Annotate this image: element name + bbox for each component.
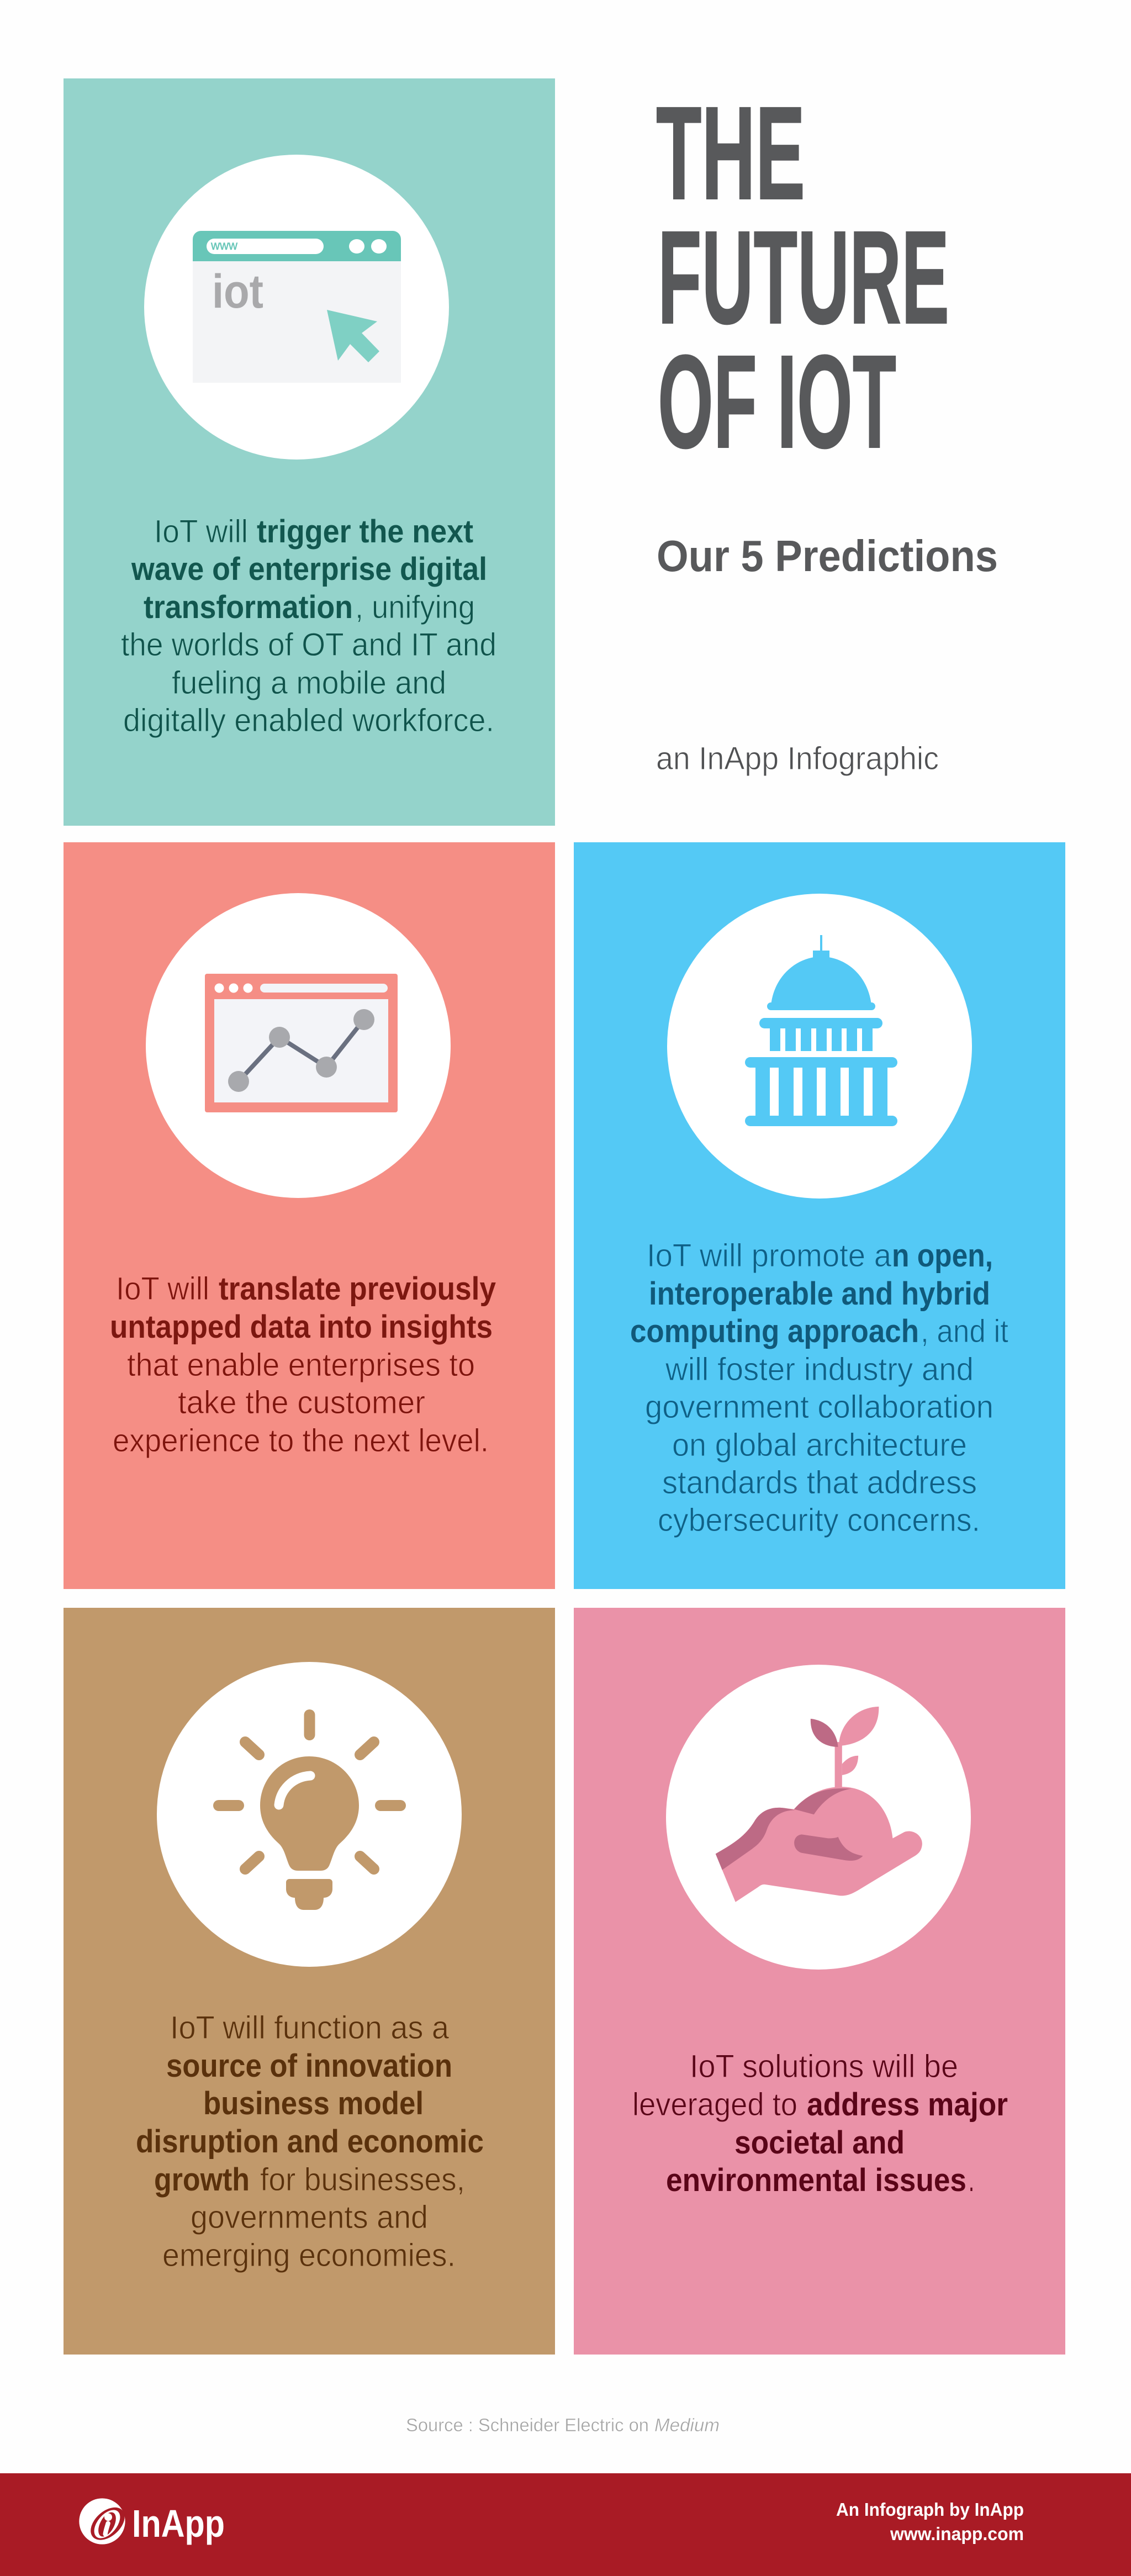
text: prediction 1: IoT will xyxy=(154,514,248,550)
subtitle: Our 5 Predictions xyxy=(657,531,998,580)
icon circle: hand with seedling xyxy=(666,1665,971,1970)
footer bar xyxy=(0,2473,1131,2576)
icon circle: chart xyxy=(146,893,451,1198)
text: prediction 4: IoT will function as a xyxy=(170,2010,450,2046)
text: prediction 3: interoperable and hybrid xyxy=(649,1276,990,1312)
logo: InApp: InApp xyxy=(132,2502,225,2545)
text: prediction 3 xyxy=(630,1238,1008,1538)
panel: source of innovation (tan) xyxy=(64,1608,555,2355)
text: prediction 5: leveraged to xyxy=(632,2087,797,2123)
panel: untapped data (coral) xyxy=(64,842,555,1589)
panel: trigger next wave (teal) xyxy=(64,78,555,826)
text: prediction 2: IoT will xyxy=(116,1271,209,1307)
source note: Source : Schneider Electric on xyxy=(406,2415,649,2435)
text: prediction 1: transformation xyxy=(144,589,353,625)
text: prediction 1: wave of enterprise digital xyxy=(131,551,487,587)
icon circle: light bulb xyxy=(157,1662,462,1967)
text: prediction 1: digitally enabled workforce. xyxy=(123,703,494,738)
panel: open computing (blue) xyxy=(574,842,1065,1589)
text: prediction 4: emerging economies. xyxy=(162,2237,456,2273)
text: prediction 1: , unifying xyxy=(355,589,475,625)
text: prediction 3: , and it xyxy=(921,1313,1008,1349)
panel: societal issues (pink) xyxy=(574,1608,1065,2355)
icon: light bulb xyxy=(219,1715,400,1910)
icon: browser window with iot and cursor: iot xyxy=(212,265,263,318)
icon: hand holding seedling xyxy=(716,1707,922,1902)
text: prediction 2: experience to the next level. xyxy=(113,1423,489,1459)
icon: browser line chart xyxy=(205,974,398,1112)
footer credits: www.inapp.com xyxy=(890,2524,1024,2544)
text: prediction 5: . xyxy=(969,2162,974,2198)
text: prediction 3: cybersecurity concerns. xyxy=(658,1502,980,1538)
text: prediction 5 xyxy=(632,2049,1008,2198)
text: prediction 4 xyxy=(136,2010,484,2273)
text: prediction 3: n open, xyxy=(892,1238,993,1274)
text: prediction 1: the worlds of OT and IT and xyxy=(121,627,496,663)
icon: browser window with iot and cursor xyxy=(193,231,401,383)
text: prediction 3: computing approach xyxy=(630,1313,919,1349)
text: prediction 3: will foster industry and xyxy=(665,1352,974,1387)
footer credits xyxy=(836,2499,1024,2544)
text: prediction 2: take the customer xyxy=(178,1385,425,1421)
icon: capitol building xyxy=(745,935,897,1126)
text: prediction 4: business model xyxy=(203,2086,424,2121)
source note: Medium xyxy=(654,2415,720,2435)
icon: browser window with iot and cursor: www xyxy=(210,238,237,252)
text: prediction 3: IoT will promote a xyxy=(647,1238,892,1274)
text: prediction 2: untapped data into insights xyxy=(110,1309,493,1345)
text: prediction 2: that enable enterprises to xyxy=(127,1347,475,1383)
text: prediction 5: societal and xyxy=(734,2125,905,2161)
text: prediction 4: growth xyxy=(154,2162,250,2198)
text: prediction 3: standards that address xyxy=(662,1465,977,1501)
text: prediction 5: IoT solutions will be xyxy=(690,2049,958,2084)
text: prediction 3: on global architecture xyxy=(672,1427,967,1463)
byline: an InApp Infographic xyxy=(656,741,939,777)
text: prediction 1: fueling a mobile and xyxy=(172,665,446,701)
footer credits: An Infograph by InApp xyxy=(836,2499,1024,2520)
icon circle: capitol xyxy=(667,894,972,1199)
logo: InApp xyxy=(79,2498,225,2546)
text: prediction 2: translate previously xyxy=(219,1271,496,1307)
text: prediction 2 xyxy=(110,1271,496,1459)
text: prediction 4: disruption and economic xyxy=(136,2124,484,2160)
text: prediction 4: for businesses, xyxy=(260,2162,465,2198)
text: prediction 1: trigger the next xyxy=(257,514,473,550)
icon circle: browser xyxy=(144,155,449,460)
text: prediction 3: government collaboration xyxy=(645,1389,993,1425)
text: prediction 5: environmental issues xyxy=(666,2162,966,2198)
text: prediction 1 xyxy=(121,514,496,738)
title xyxy=(656,79,949,476)
text: prediction 5: address major xyxy=(807,2087,1008,2123)
text: prediction 4: source of innovation xyxy=(166,2048,452,2084)
text: prediction 4: governments and xyxy=(191,2199,428,2235)
